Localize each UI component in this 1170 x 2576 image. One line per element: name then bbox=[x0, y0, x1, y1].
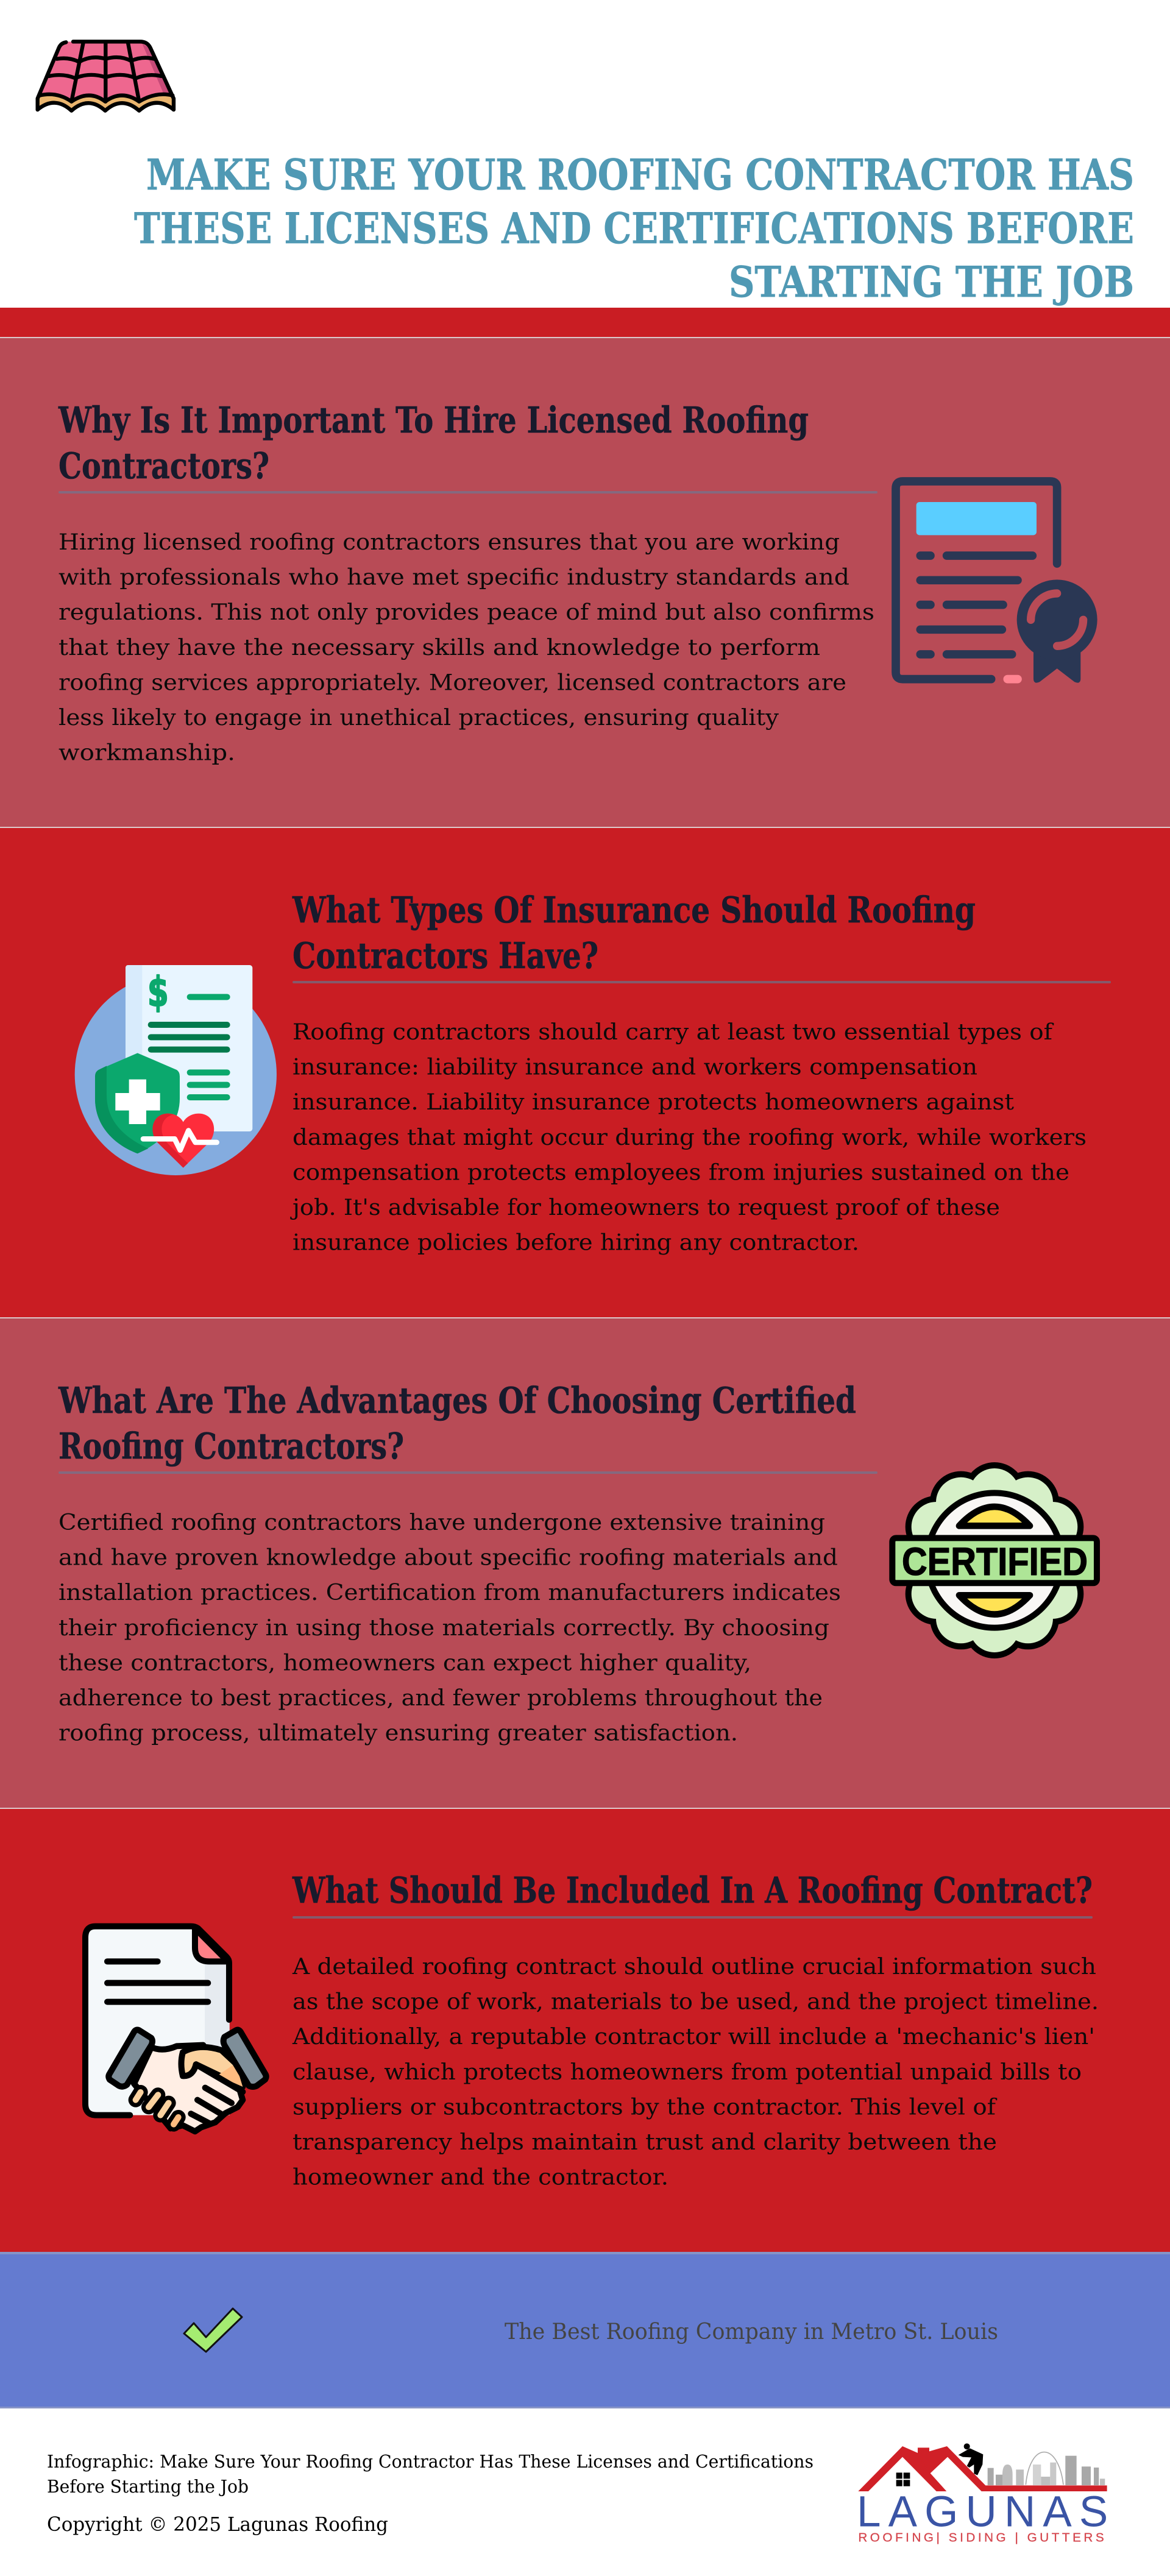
icon: check mark bbox=[184, 2309, 242, 2352]
body text: roofing contract: as the scope of work, materials to be used, and the project timeline. bbox=[292, 1990, 1099, 2015]
body text: types of insurance: Roofing contractors should carry at least two essential types of bbox=[292, 1020, 1054, 1045]
body text: types of insurance: job. It's advisable for homeowners to request proof of these bbox=[290, 1195, 1000, 1220]
body text: types of insurance: insurance. Liability insurance protects homeowners against bbox=[292, 1090, 1015, 1115]
panel: types of insurance bbox=[0, 828, 1170, 1318]
body text: roofing contract: suppliers or subcontractors by the contractor. This level of bbox=[292, 2095, 998, 2120]
icon: certified badge: CERTIFIED bbox=[902, 1540, 1088, 1583]
body text: roofing contract: Additionally, a reputable contractor will include a 'mechanic's lien' bbox=[292, 2025, 1095, 2050]
heading: advantages of certified: What Are The Advantages Of Choosing Certified bbox=[58, 1379, 856, 1421]
body text: roofing contract bbox=[292, 1955, 1099, 2190]
body text: roofing contract: clause, which protects homeowners from potential unpaid bills to bbox=[292, 2060, 1082, 2085]
logo: Lagunas Roofing: ROOFING| SIDING | GUTTERS bbox=[858, 2531, 1104, 2545]
body text: advantages of certified: roofing process, ultimately ensuring greater satisfaction. bbox=[58, 1721, 738, 1746]
body text: types of insurance: compensation protects employees from injuries sustained on the bbox=[292, 1160, 1069, 1185]
body text: types of insurance: damages that might occur during the roofing work, while workers bbox=[292, 1125, 1087, 1150]
heading: why hire licensed bbox=[58, 399, 809, 487]
heading: why hire licensed: Why Is It Important To Hire Licensed Roofing bbox=[58, 399, 809, 441]
body text: roofing contract: transparency helps maintain trust and clarity between the bbox=[292, 2130, 997, 2155]
heading: types of insurance: What Types Of Insurance Should Roofing bbox=[292, 889, 976, 931]
body text: types of insurance bbox=[290, 1020, 1087, 1256]
panel: why hire licensed bbox=[0, 338, 1170, 828]
tagline text: The Best Roofing Company in Metro St. Louis bbox=[505, 2319, 998, 2344]
body text: roofing contract: A detailed roofing contract should outline crucial information such bbox=[292, 1955, 1096, 1980]
heading: why hire licensed: Contractors? bbox=[58, 445, 269, 487]
heading: types of insurance bbox=[292, 889, 976, 977]
body text: why hire licensed: workmanship. bbox=[58, 741, 235, 766]
body text: types of insurance: insurance policies before hiring any contractor. bbox=[292, 1231, 859, 1256]
body text: why hire licensed: less likely to engage in unethical practices, ensuring quality bbox=[58, 706, 779, 731]
body text: advantages of certified: installation practices. Certification from manufacturers indicates bbox=[58, 1580, 841, 1605]
body text: advantages of certified: and have proven knowledge about specific roofing materials and bbox=[58, 1546, 838, 1571]
copyright: Copyright © 2025 Lagunas Roofing bbox=[47, 2513, 388, 2536]
body text: why hire licensed: regulations. This not only provides peace of mind but also confirms bbox=[58, 600, 874, 625]
body text: advantages of certified bbox=[58, 1510, 841, 1746]
icon: certificate with medal bbox=[896, 481, 1097, 683]
icon: certified badge bbox=[892, 1462, 1097, 1658]
body text: roofing contract: homeowner and the contractor. bbox=[292, 2165, 668, 2190]
body text: why hire licensed: with professionals who have met specific industry standards and bbox=[58, 565, 849, 590]
footer caption: Infographic: Make Sure Your Roofing Contractor Has These Licenses and Certifications bbox=[47, 2451, 814, 2472]
logo: Lagunas Roofing bbox=[857, 2443, 1108, 2545]
body text: why hire licensed: roofing services appropriately. Moreover, licensed contractors are bbox=[58, 670, 846, 695]
footer caption bbox=[47, 2451, 814, 2497]
body text: advantages of certified: these contractors, homeowners can expect higher quality, bbox=[58, 1651, 751, 1675]
logo: Lagunas Roofing: LAGUNAS bbox=[857, 2488, 1108, 2536]
body text: advantages of certified: adherence to best practices, and fewer problems throughout the bbox=[58, 1686, 823, 1711]
icon: insurance document bbox=[75, 965, 277, 1175]
panel: advantages of certified bbox=[0, 1318, 1170, 1809]
body text: why hire licensed bbox=[58, 530, 874, 766]
heading: advantages of certified bbox=[58, 1379, 856, 1467]
footer caption: Before Starting the Job bbox=[47, 2476, 249, 2497]
body text: types of insurance: insurance: liability insurance and workers compensation bbox=[292, 1055, 977, 1080]
body text: why hire licensed: Hiring licensed roofing contractors ensures that you are working bbox=[58, 530, 840, 555]
heading: advantages of certified: Roofing Contractors? bbox=[58, 1425, 404, 1467]
body text: advantages of certified: their proficiency in using those materials correctly. By choosing bbox=[58, 1616, 829, 1641]
heading: types of insurance: Contractors Have? bbox=[292, 935, 598, 977]
icon: roof tiles bbox=[38, 41, 174, 111]
title bbox=[134, 150, 1134, 307]
icon: contract and handshake bbox=[85, 1927, 266, 2131]
icon: insurance document: $ bbox=[147, 968, 169, 1016]
body text: why hire licensed: that they have the necessary skills and knowledge to perform bbox=[58, 635, 820, 660]
panel: tagline banner bbox=[0, 2252, 1170, 2408]
header band bbox=[0, 308, 1170, 338]
body text: advantages of certified: Certified roofing contractors have undergone extensive training bbox=[58, 1510, 825, 1535]
panel: roofing contract bbox=[0, 1809, 1170, 2252]
